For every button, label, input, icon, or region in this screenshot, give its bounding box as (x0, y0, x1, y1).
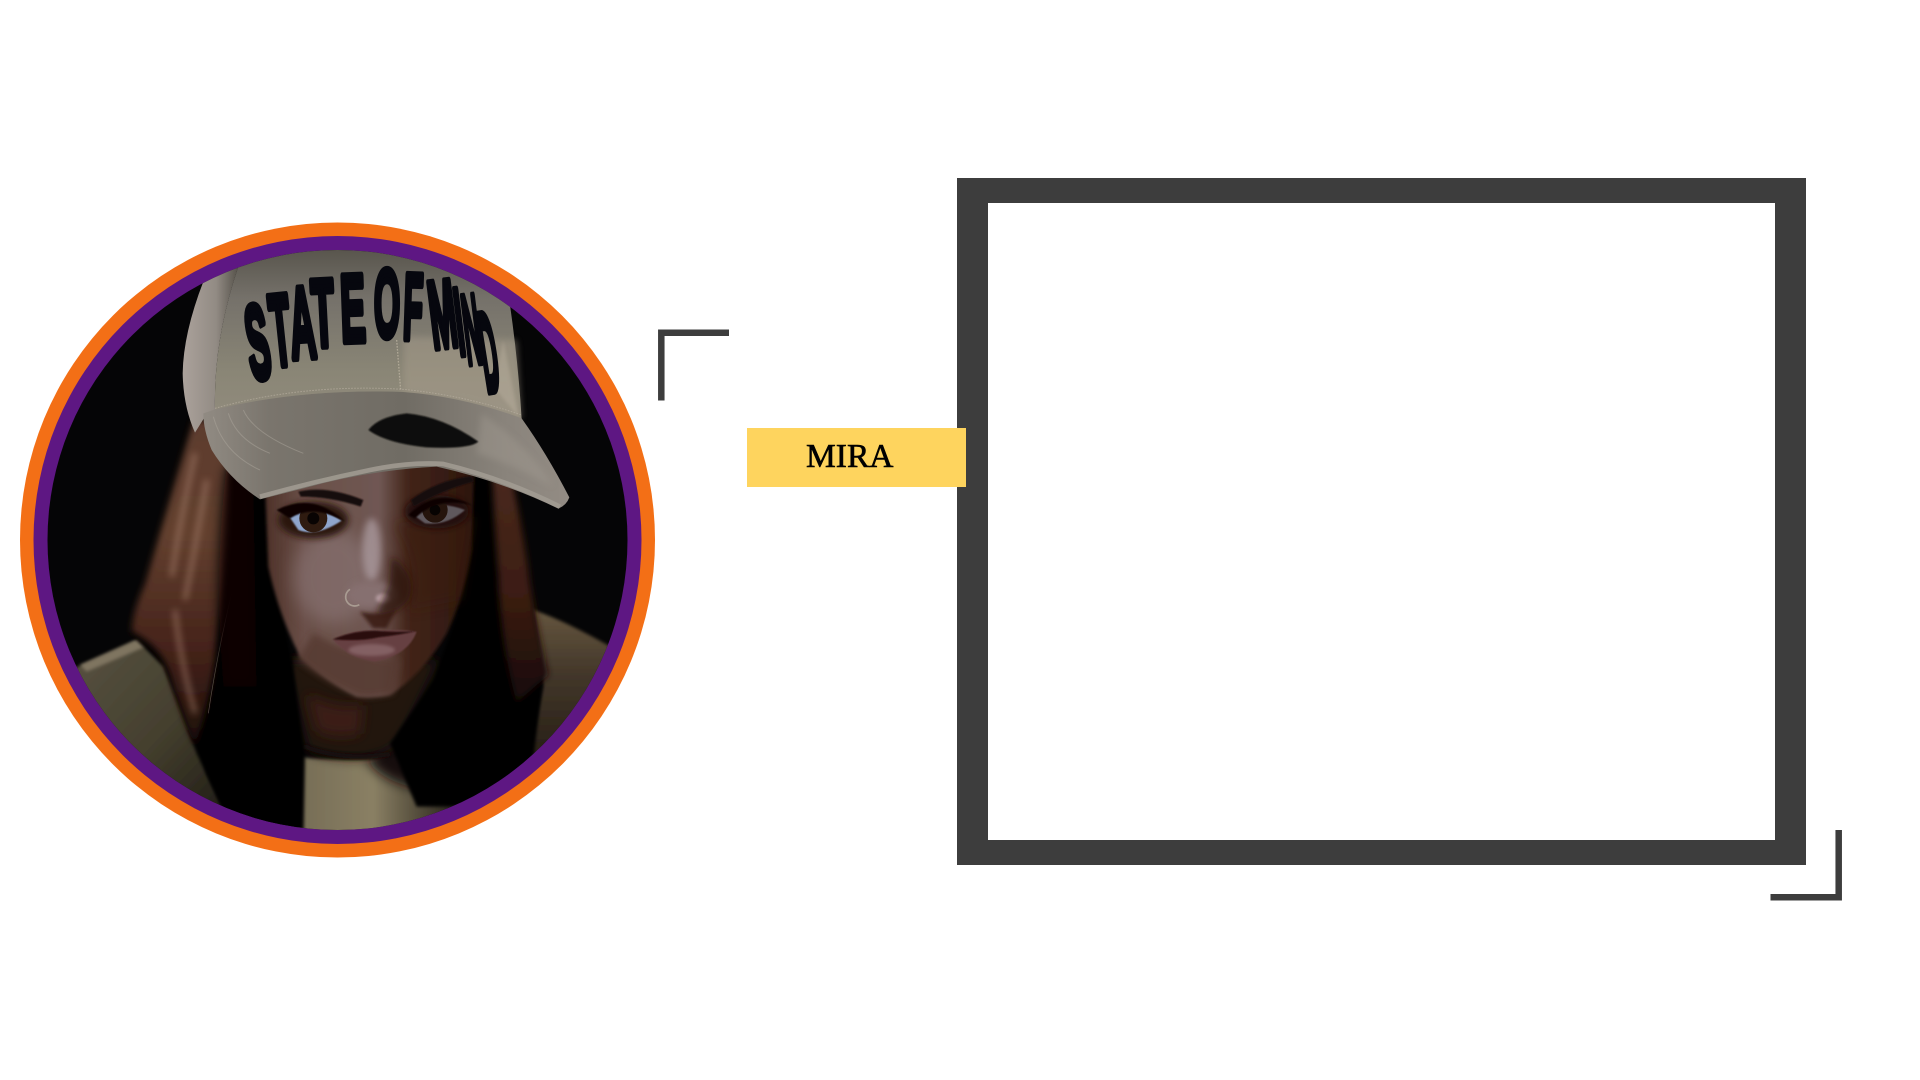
cap lettering: STATE OF MIND: M (423, 261, 462, 370)
hair right: brown strands (488, 481, 551, 702)
purple ring (34, 236, 642, 844)
visor shadow spot (368, 413, 478, 448)
shirt shadow (362, 750, 410, 794)
name text: MIRA (806, 438, 893, 475)
cap visor (203, 391, 569, 509)
t-shirt (297, 756, 457, 830)
portrait: circular photo with orange and purple rings (20, 222, 655, 858)
main frame: empty dark-bordered box (957, 178, 1806, 865)
cap lettering: STATE OF MIND: D (471, 291, 507, 416)
hair left: brown strands (132, 420, 257, 745)
right eye (405, 495, 472, 528)
hair left: black base (134, 636, 307, 828)
cap lettering: STATE OF MIND: E (339, 257, 367, 363)
cap lettering: STATE OF MIND: F (402, 254, 425, 359)
shoulders (33, 608, 633, 847)
cap lettering: STATE OF MIND: N (457, 276, 486, 386)
name tag: MIRA (747, 428, 966, 487)
cap lettering: STATE OF MIND: S (239, 284, 277, 402)
cap lettering: STATE OF MIND (244, 266, 500, 396)
cap lettering: STATE OF MIND: T (264, 273, 297, 387)
cap lettering: STATE OF MIND: T (309, 261, 337, 368)
corner bracket: bottom right (1770, 830, 1842, 900)
nose (347, 518, 411, 628)
hair right: black base (390, 609, 544, 808)
neck (283, 660, 440, 758)
cap lettering: STATE OF MIND: A (286, 267, 319, 381)
cap lettering: STATE OF MIND: I (449, 268, 470, 375)
lips (333, 630, 417, 662)
orange ring (20, 222, 655, 858)
photo (33, 233, 640, 847)
baseball cap (183, 233, 569, 509)
corner bracket: top left (658, 330, 729, 400)
eyebrows (298, 476, 474, 507)
cap crown (215, 233, 522, 419)
nose ring (346, 589, 359, 606)
subject: body, hair and face (33, 413, 633, 847)
face (263, 440, 475, 697)
left eye (277, 502, 348, 538)
cap side panel (183, 267, 238, 433)
cap lettering: STATE OF MIND: O (374, 251, 400, 358)
